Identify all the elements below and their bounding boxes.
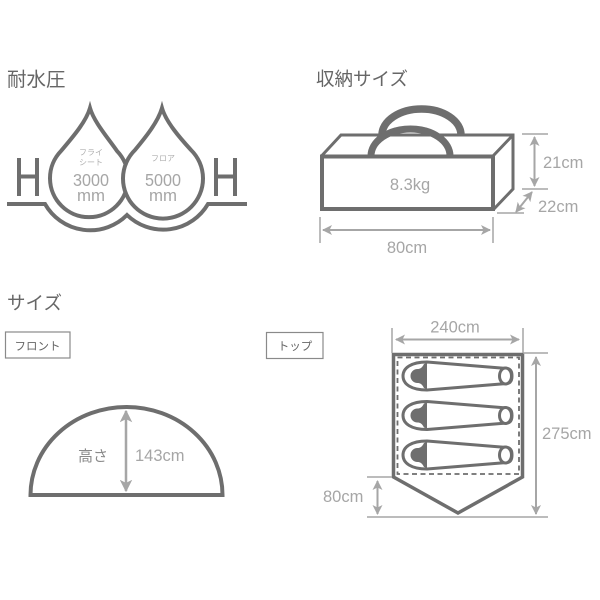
water pressure diagram [7, 108, 247, 230]
dimension: height 21cm [522, 134, 583, 189]
storage bag diagram [322, 109, 513, 210]
storage dimensions [320, 134, 583, 257]
tent outline [394, 354, 522, 513]
dimension: depth 22cm: 22cm [538, 198, 578, 216]
dimension: depth 22cm [497, 192, 578, 216]
sleeping bag 2 [403, 402, 512, 430]
drop: fly sheet [50, 108, 128, 217]
bag top and side [322, 135, 513, 210]
ground line [7, 204, 247, 230]
heading: storage size: 収納サイズ [316, 68, 408, 90]
label: top [266, 332, 323, 358]
dimension: width 240cm [392, 318, 523, 353]
drop: fly sheet: mm [77, 186, 105, 205]
tent dimensions [323, 318, 592, 517]
drop: fly sheet: シート [79, 158, 103, 167]
drop: fly sheet: 3000 [73, 170, 109, 190]
drop: floor: 5000 [145, 170, 181, 190]
left H [19, 158, 37, 196]
weight label: 8.3kg [390, 176, 430, 194]
label: top: トップ [278, 340, 313, 353]
dimension: length 275cm [367, 353, 592, 517]
label: front [6, 332, 70, 358]
inner dashed rectangle [398, 358, 519, 474]
dimension: length 275cm: 275cm [542, 425, 592, 443]
height arrow [125, 411, 127, 491]
drop: floor: mm [149, 186, 177, 205]
bag front [322, 156, 493, 209]
heading: water pressure: 耐水圧 [7, 69, 66, 91]
front view dome [30, 407, 222, 495]
right H [216, 158, 235, 196]
dimension: width 80cm [320, 217, 493, 257]
height value: 143cm [135, 447, 185, 465]
dimension: width 80cm: 80cm [387, 239, 427, 257]
sleeping bag 3 [403, 441, 512, 469]
sleeping bag 1 [403, 362, 512, 390]
front handle [371, 129, 450, 156]
dimension: height 21cm: 21cm [543, 154, 583, 172]
dimension: vestibule 80cm [323, 477, 392, 514]
label: front: フロント [14, 341, 60, 353]
drop: fly sheet: フライ [79, 148, 103, 157]
back handle [382, 109, 461, 135]
drop: floor: フロア [151, 154, 175, 163]
dimension: width 240cm: 240cm [430, 318, 480, 336]
height label: 高さ [78, 448, 108, 465]
drop: floor [123, 108, 203, 219]
dimension: vestibule 80cm: 80cm [323, 488, 363, 506]
top view tent [394, 354, 522, 513]
heading: size: サイズ [7, 292, 62, 314]
